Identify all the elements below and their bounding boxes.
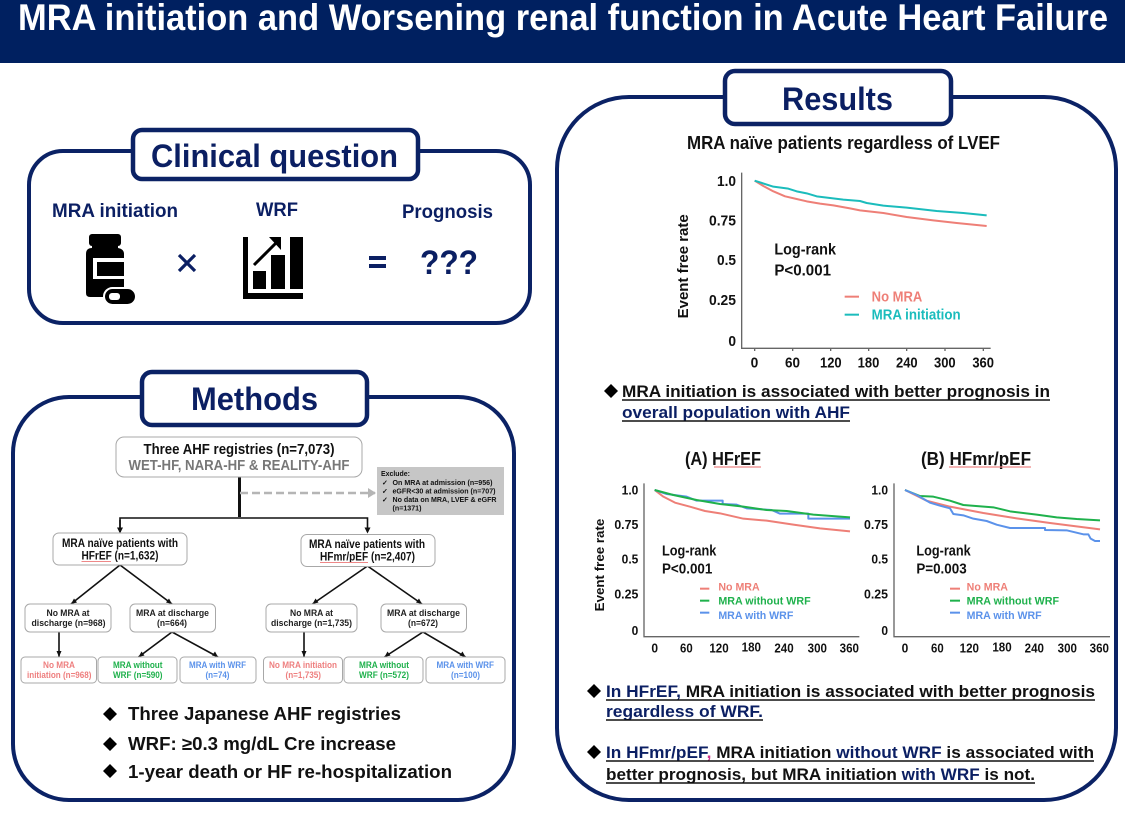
connector lines	[56, 477, 466, 657]
chart: overall Kaplan-Meier: 0.75	[709, 213, 736, 229]
chart: HFmr/pEF Kaplan-Meier: 1.0	[871, 482, 888, 497]
header banner	[0, 0, 1125, 63]
chart: HFrEF Kaplan-Meier: 60	[680, 641, 693, 656]
box: exclusion criteria: eGFR<30 at admission (n=707)	[392, 486, 496, 496]
chart: HFrEF Kaplan-Meier	[592, 482, 859, 656]
chart: HFrEF Kaplan-Meier: P<0.001	[662, 561, 712, 577]
chart: overall Kaplan-Meier: 360	[972, 355, 994, 371]
conclusion: HFmr/pEF: better prognosis, but MRA initiation with WRF is not.	[606, 766, 1035, 784]
chart: HFmr/pEF Kaplan-Meier: 360	[1090, 641, 1109, 656]
chart: HFmr/pEF Kaplan-Meier: 180	[992, 640, 1012, 655]
conclusion: HFmr/pEF	[587, 744, 1094, 784]
chart: HFrEF Kaplan-Meier: 1.0	[622, 482, 638, 497]
box: HFrEF patients: MRA naïve patients with	[62, 538, 178, 550]
box: exclusion criteria: Exclude:	[381, 469, 410, 478]
box: three AHF registries: WET-HF, NARA-HF & REALITY-AHF	[128, 458, 350, 474]
box: MRA without WRF HFrEF: MRA without	[113, 660, 162, 670]
box: no MRA initiation HFrEF: initiation (n=968)	[27, 670, 92, 680]
box: no MRA at discharge HFrEF: No MRA at	[46, 608, 90, 619]
conclusion: HFrEF	[587, 683, 1095, 721]
question marks: ???	[420, 244, 478, 282]
box: MRA at discharge HFmr/pEF: MRA at discharge	[387, 608, 460, 619]
chart: HFrEF Kaplan-Meier: 240	[774, 641, 794, 656]
heading: results: Results	[782, 81, 893, 117]
box: MRA with WRF HFmr/pEF	[426, 657, 505, 683]
chart: overall Kaplan-Meier: 0	[751, 355, 758, 371]
chart: overall Kaplan-Meier: Event free rate	[676, 214, 692, 318]
box: exclusion criteria: (n=1371)	[392, 504, 422, 512]
chart: HFrEF Kaplan-Meier: No MRA	[718, 581, 760, 593]
box: MRA with WRF HFmr/pEF: (n=100)	[451, 670, 480, 680]
box: HFmr/pEF patients: HFmr/pEF (n=2,407)	[320, 552, 415, 564]
chart title: HFmr/pEF: (B) HFmr/pEF	[921, 448, 1031, 469]
box: no MRA at discharge HFrEF: discharge (n=968)	[32, 618, 106, 629]
chart: overall Kaplan-Meier: P<0.001	[774, 262, 831, 279]
chart: HFrEF Kaplan-Meier: 300	[808, 641, 827, 656]
chart: HFmr/pEF Kaplan-Meier: 0.75	[864, 517, 889, 532]
chart: HFmr/pEF Kaplan-Meier: 240	[1025, 641, 1044, 656]
chart: HFmr/pEF Kaplan-Meier: P=0.003	[916, 561, 967, 577]
chart: HFmr/pEF Kaplan-Meier: MRA without WRF	[967, 595, 1059, 607]
chart: HFrEF Kaplan-Meier: MRA without WRF	[718, 595, 811, 607]
heading: methods: Methods	[191, 381, 318, 417]
box: no MRA initiation HFrEF: No MRA	[43, 660, 75, 670]
chart: overall Kaplan-Meier	[676, 173, 994, 371]
conclusion: overall population: overall population with AHF	[622, 404, 850, 422]
heading: clinical question: Clinical question	[151, 138, 398, 174]
box: MRA at discharge HFmr/pEF: (n=672)	[408, 618, 438, 629]
box: no MRA initiation HFmr/pEF: No MRA initiation	[269, 660, 337, 670]
box: MRA with WRF HFmr/pEF: MRA with WRF	[436, 660, 494, 670]
chart: HFrEF Kaplan-Meier: 0.5	[622, 552, 639, 567]
box: HFmr/pEF patients: MRA naïve patients with	[309, 539, 425, 551]
box: no MRA initiation HFmr/pEF	[264, 657, 342, 683]
box: no MRA at discharge HFmr/pEF: No MRA at	[290, 608, 334, 619]
chart: HFmr/pEF Kaplan-Meier: 0	[902, 641, 908, 656]
panel: results	[557, 71, 1116, 800]
box: HFrEF patients	[53, 533, 187, 565]
box: exclusion criteria: On MRA at admission (n=956)	[392, 478, 493, 487]
heading: clinical question	[133, 130, 418, 179]
icon: pill bottle	[86, 234, 136, 305]
box: exclusion criteria: No data on MRA, LVEF & eGFR	[392, 495, 497, 504]
chart: HFmr/pEF Kaplan-Meier: 300	[1058, 641, 1077, 656]
chart: overall Kaplan-Meier: 1.0	[717, 174, 736, 190]
box: HFrEF patients: HFrEF (n=1,632)	[82, 550, 159, 562]
chart: overall Kaplan-Meier: No MRA	[872, 289, 923, 305]
chart: HFmr/pEF Kaplan-Meier: No MRA	[967, 581, 1008, 593]
chart: overall Kaplan-Meier: 0.5	[717, 253, 736, 269]
chart title: HFrEF: (A) HFrEF	[685, 448, 761, 469]
box: no MRA at discharge HFmr/pEF: discharge (n=1,735)	[271, 618, 352, 629]
chart: HFrEF Kaplan-Meier: MRA with WRF	[718, 610, 793, 622]
heading: methods	[142, 372, 367, 425]
conclusion: HFrEF: regardless of WRF.	[606, 703, 763, 721]
panel: methods	[13, 372, 514, 800]
chart: HFrEF Kaplan-Meier: 0.25	[614, 586, 639, 601]
heading: results	[725, 71, 951, 124]
box: no MRA initiation HFrEF	[21, 657, 96, 683]
chart: HFrEF Kaplan-Meier: 0	[651, 641, 658, 656]
conclusion: overall population	[604, 383, 1050, 422]
chart: HFrEF Kaplan-Meier: Event free rate	[592, 519, 607, 611]
chart: overall Kaplan-Meier: 60	[785, 355, 800, 371]
label: prognosis: Prognosis	[402, 202, 493, 223]
label: MRA initiation: MRA initiation	[52, 201, 178, 222]
chart: overall Kaplan-Meier: 300	[934, 355, 956, 371]
box: MRA with WRF HFrEF: (n=74)	[206, 670, 230, 680]
methods bullet list	[103, 704, 452, 782]
box: MRA at discharge HFmr/pEF	[381, 604, 466, 632]
chart: HFmr/pEF Kaplan-Meier	[864, 482, 1110, 656]
methods bullet list: WRF: ≥0.3 mg/dL Cre increase	[128, 734, 396, 754]
flowchart	[21, 437, 505, 683]
chart: overall Kaplan-Meier: 120	[820, 355, 842, 371]
chart: HFmr/pEF Kaplan-Meier: 0	[881, 623, 888, 638]
icon: equals sign	[369, 256, 386, 268]
conclusion: overall population: MRA initiation is associated with better prognosis in	[622, 383, 1050, 401]
chart: HFmr/pEF Kaplan-Meier: 0.25	[864, 586, 889, 601]
box: MRA without WRF HFrEF	[98, 657, 177, 683]
chart: overall Kaplan-Meier: Log-rank	[774, 242, 836, 259]
box: no MRA initiation HFmr/pEF: (n=1,735)	[286, 670, 321, 680]
chart: overall Kaplan-Meier: 180	[858, 355, 879, 371]
chart: overall Kaplan-Meier: 0	[728, 334, 736, 350]
box: MRA with WRF HFrEF: MRA with WRF	[189, 660, 246, 670]
conclusion: HFrEF: In HFrEF, MRA initiation is associated with better prognosis	[606, 683, 1095, 701]
chart: HFrEF Kaplan-Meier: 0.75	[614, 517, 639, 532]
chart: HFrEF Kaplan-Meier: 0	[632, 623, 638, 638]
icon: multiplication sign	[179, 255, 195, 271]
box: three AHF registries	[116, 437, 362, 477]
box: no MRA at discharge HFmr/pEF	[266, 604, 357, 632]
chart: HFrEF Kaplan-Meier: Log-rank	[662, 543, 717, 559]
box: MRA without WRF HFrEF: WRF (n=590)	[113, 670, 162, 680]
box: exclusion criteria: ✓	[382, 478, 388, 487]
box: exclusion criteria: ✓	[382, 495, 388, 504]
box: HFmr/pEF patients	[301, 534, 435, 566]
chart: overall Kaplan-Meier: 240	[896, 355, 918, 371]
box: MRA without WRF HFmr/pEF: MRA without	[359, 660, 409, 670]
icon: rising bar chart	[243, 237, 303, 299]
chart: HFrEF Kaplan-Meier: 360	[840, 641, 859, 656]
chart: HFmr/pEF Kaplan-Meier: 60	[931, 641, 944, 656]
box: MRA at discharge HFrEF: (n=664)	[157, 618, 187, 629]
methods bullet list: Three Japanese AHF registries	[128, 704, 401, 724]
box: three AHF registries: Three AHF registries (n=7,073)	[144, 442, 335, 458]
chart: HFrEF Kaplan-Meier: 120	[709, 641, 729, 656]
chart: overall Kaplan-Meier: 0.25	[709, 293, 736, 309]
panel: clinical question	[29, 130, 530, 323]
box: MRA at discharge HFrEF	[130, 604, 216, 632]
chart: overall Kaplan-Meier: MRA initiation	[872, 307, 961, 323]
chart: HFrEF Kaplan-Meier: 180	[742, 640, 761, 655]
chart: HFmr/pEF Kaplan-Meier: MRA with WRF	[967, 610, 1042, 622]
label: WRF: WRF	[256, 200, 298, 221]
box: MRA without WRF HFmr/pEF	[344, 657, 423, 683]
box: MRA at discharge HFrEF: MRA at discharge	[136, 608, 209, 619]
exclusion arrow	[240, 492, 375, 494]
box: exclusion criteria: ✓	[382, 486, 388, 496]
box: MRA with WRF HFrEF	[180, 657, 256, 683]
methods bullet list: 1-year death or HF re-hospitalization	[128, 762, 452, 782]
chart: HFmr/pEF Kaplan-Meier: Log-rank	[916, 543, 971, 559]
box: exclusion criteria	[377, 467, 504, 515]
box: no MRA at discharge HFrEF	[25, 604, 111, 632]
chart: HFmr/pEF Kaplan-Meier: 120	[960, 641, 979, 656]
conclusion: HFmr/pEF: In HFmr/pEF , MRA initiation without WRF is associated with	[606, 744, 1094, 762]
box: MRA without WRF HFmr/pEF: WRF (n=572)	[359, 670, 409, 680]
chart: HFmr/pEF Kaplan-Meier: 0.5	[871, 552, 889, 567]
chart title: overall: MRA naïve patients regardless of LVEF	[687, 132, 1000, 153]
